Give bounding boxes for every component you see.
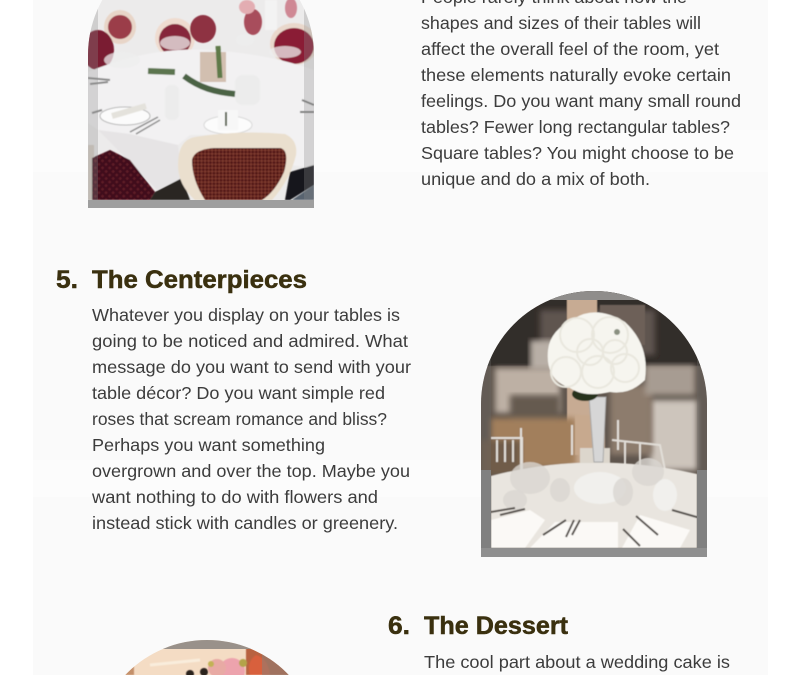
chairs	[491, 420, 665, 472]
grey frame overlay	[481, 291, 707, 557]
text block: table shapes paragraph: feelings. Do you want many small round	[421, 91, 741, 111]
text block: centerpieces paragraph: overgrown and over the top. Maybe you	[92, 461, 410, 481]
heading: 6. The Dessert: The Dessert	[424, 612, 569, 640]
text block: centerpieces paragraph: table décor? Do you want simple red	[92, 383, 385, 403]
text block: centerpieces paragraph: Perhaps you want something	[92, 435, 325, 455]
text block: centerpieces paragraph	[91, 305, 411, 533]
heading: 6. The Dessert: 6.	[388, 612, 410, 640]
photo: round banquet table with maroon chairs	[82, 0, 318, 208]
grey frame overlay	[88, 0, 314, 208]
photo: white hydrangea centerpiece on tall vase	[481, 291, 707, 557]
text block: centerpieces paragraph: message do you want to send with your	[92, 357, 411, 377]
text block: table shapes paragraph: tables? Fewer long rectangular tables?	[421, 117, 730, 137]
glassware	[103, 34, 302, 65]
table with cloth	[491, 462, 697, 548]
dark foreground chair and floor	[88, 145, 314, 200]
text block: table shapes paragraph: Square tables? You might choose to be	[421, 143, 734, 163]
front chair	[178, 133, 296, 200]
heading: 5. The Centerpieces: The Centerpieces	[92, 266, 307, 294]
glassware	[503, 458, 677, 511]
text block: table shapes paragraph: unique and do a mix of both.	[421, 169, 650, 189]
text block: centerpieces paragraph: roses that scream romance and bliss?	[92, 409, 387, 429]
text block: table shapes paragraph: these elements naturally evoke certain	[421, 65, 731, 85]
text block: table shapes paragraph: shapes and sizes of their tables will	[421, 13, 701, 33]
text block: centerpieces paragraph: want nothing to do with flowers and	[91, 487, 378, 507]
text block: centerpieces paragraph: going to be noticed and admired. What	[92, 331, 408, 351]
greenery centerpiece	[148, 46, 235, 94]
text block: centerpieces paragraph: instead stick with candles or greenery.	[92, 513, 398, 533]
text block: dessert paragraph: The cool part about a wedding cake is	[424, 652, 730, 672]
text block: table shapes paragraph: affect the overall feel of the room, yet	[421, 39, 719, 59]
hydrangea bouquet	[548, 312, 646, 401]
text block: centerpieces paragraph: Whatever you display on your tables is	[92, 305, 400, 325]
napkins	[491, 510, 690, 548]
vase	[589, 397, 606, 462]
fruit and garnish	[125, 647, 289, 675]
grey frame overlay	[163, 640, 288, 675]
photo: dessert platter, top edge	[125, 640, 289, 675]
back chairs	[82, 0, 318, 70]
tablecloth	[88, 49, 314, 190]
place settings	[88, 78, 314, 134]
heading: 5. The Centerpieces: 5.	[56, 266, 78, 294]
cutlery	[491, 508, 700, 546]
text block: table shapes paragraph	[421, 0, 741, 189]
hazy room background	[481, 291, 707, 475]
